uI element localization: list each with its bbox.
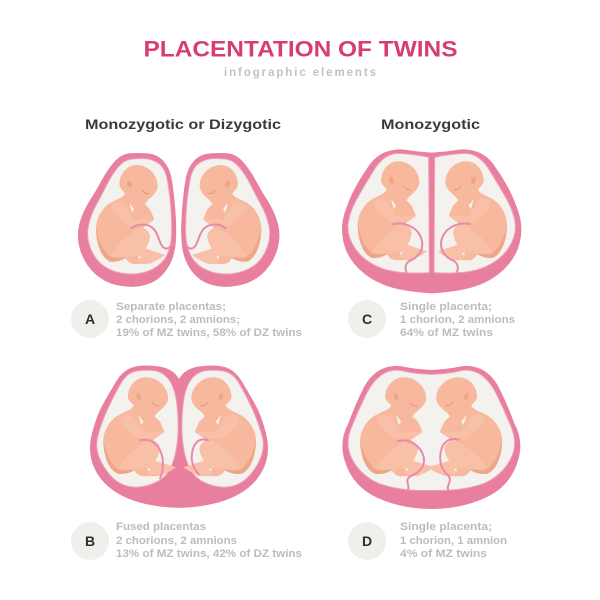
label D: Single placenta;: [400, 521, 492, 533]
label A: Separate placentas;: [116, 301, 226, 313]
label B: [71, 521, 302, 560]
heading: monozygotic: Monozygotic: [381, 116, 480, 132]
label C: [348, 300, 515, 339]
cord right C: [441, 224, 470, 273]
diagram D: single placenta, one amnion: [342, 366, 520, 509]
single chamber D: [348, 370, 515, 491]
label A: 19% of MZ twins, 58% of DZ twins: [116, 327, 302, 339]
cords D: [398, 439, 459, 490]
diagram B: fused placentas: [90, 365, 268, 508]
cords B: [140, 439, 208, 478]
label B: 2 chorions, 2 amnions: [116, 535, 237, 547]
outer shell B: [90, 365, 268, 508]
diagram C: single placenta, two amnions: [342, 149, 521, 293]
label C: C: [362, 311, 372, 327]
outer shell C: [342, 149, 521, 293]
label C: 1 chorion, 2 amnions: [400, 314, 515, 326]
left sac A: [78, 153, 176, 287]
label B: 13% of MZ twins, 42% of DZ twins: [116, 548, 302, 560]
right fetus B: [184, 377, 256, 476]
label C: Single placenta;: [400, 301, 492, 313]
label A: A: [85, 311, 95, 327]
right chamber C: [434, 153, 515, 273]
label A: 2 chorions, 2 amnions;: [116, 314, 240, 326]
right sac A: [181, 153, 279, 287]
title: PLACENTATION OF TWINS: [144, 36, 458, 62]
left fetus D: [360, 377, 434, 476]
right fetus C: [438, 161, 507, 260]
heading: monozygotic or dizygotic: Monozygotic or Dizygotic: [85, 116, 281, 132]
label B: Fused placentas: [116, 521, 206, 533]
cord left C: [393, 224, 422, 273]
outer shell D: [342, 366, 520, 509]
left chamber B: [97, 370, 178, 487]
label D: 1 chorion, 1 amnion: [400, 535, 507, 547]
label D: D: [362, 533, 372, 549]
label D: 4% of MZ twins: [400, 548, 487, 560]
label A: [71, 300, 302, 339]
label B: B: [85, 533, 95, 549]
left fetus C: [358, 161, 427, 260]
subtitle: infographic elements: [224, 67, 376, 79]
left chamber C: [348, 153, 429, 273]
diagram A: separate placentas: [78, 153, 279, 287]
left fetus B: [103, 377, 176, 476]
right chamber B: [182, 370, 263, 487]
right fetus D: [428, 377, 502, 476]
label D: [348, 521, 507, 560]
label C: 64% of MZ twins: [400, 327, 493, 339]
